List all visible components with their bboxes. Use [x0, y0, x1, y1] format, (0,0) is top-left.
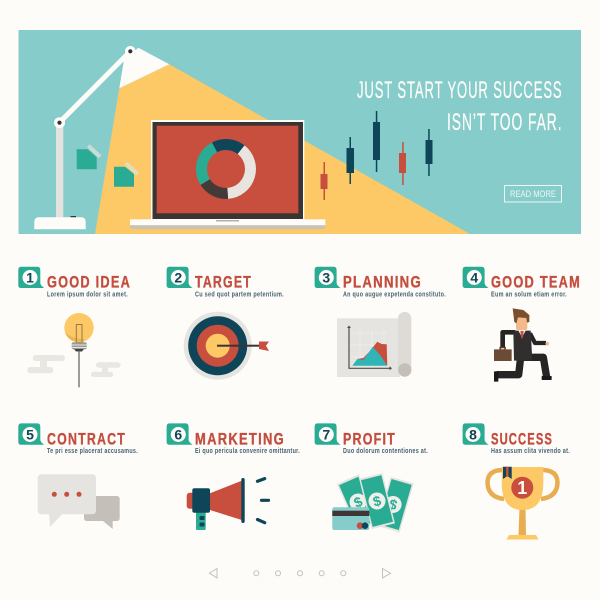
- step 6: marketing: 6: [174, 426, 182, 442]
- icon: money and credit card: $: [387, 496, 399, 513]
- step 4: good team: Eum an solum etiam error.: [491, 290, 567, 298]
- pagination controls: [210, 568, 390, 578]
- step 2: target: TARGET: [195, 274, 252, 292]
- step 4: good team: 4: [470, 270, 478, 286]
- icon: sticky note right: [114, 163, 138, 187]
- step 7: profit: [315, 423, 428, 532]
- icon: next arrow: [382, 568, 390, 578]
- step 8: success: 8: [469, 426, 477, 442]
- step 5: contract: Te pri esse placerat accusamus.: [47, 446, 138, 455]
- icon: chat bubbles: [38, 474, 120, 529]
- icon: desk lamp: [34, 46, 169, 229]
- icon: laptop: [130, 120, 325, 229]
- step 6: marketing: MARKETING: [195, 430, 285, 448]
- step 1: good idea: GOOD IDEA: [47, 274, 131, 292]
- icon: trophy: 1: [517, 478, 527, 498]
- step 5: contract: CONTRACT: [47, 430, 126, 448]
- icon: running businessman: [494, 308, 552, 382]
- step 8: success: SUCCESS: [491, 430, 553, 448]
- step 1: good idea: Lorem ipsum dolor sit amet.: [47, 290, 128, 298]
- step 3: planning: PLANNING: [343, 274, 422, 292]
- step 5: contract: [18, 423, 138, 529]
- step 5: contract: 5: [26, 426, 34, 442]
- step 2: target: Cu sed quot partem petentium.: [195, 290, 284, 298]
- icon: previous arrow: [210, 568, 217, 578]
- step 6: marketing: [167, 423, 300, 530]
- donut chart: [201, 145, 250, 193]
- step 7: profit: Duo dolorum contentiones at.: [343, 446, 428, 455]
- icon: sticky note left: [77, 146, 100, 169]
- step 1: good idea: 1: [26, 270, 34, 286]
- icon: money and credit card: $: [351, 493, 365, 511]
- step 1: good idea: [18, 267, 131, 387]
- step 3: planning: [315, 267, 446, 377]
- icon: money and credit card: [332, 473, 414, 532]
- step 8: success: [463, 423, 570, 540]
- panel: hero banner: [18, 30, 581, 234]
- step 7: profit: 7: [322, 426, 330, 442]
- icon: megaphone: [187, 478, 268, 530]
- icon: light bulb: [27, 313, 121, 387]
- candlestick chart: [320, 111, 432, 200]
- icon: blueprint chart: [337, 312, 411, 377]
- icon: money and credit card: $: [371, 492, 383, 510]
- read more button: READ MORE: [510, 189, 556, 199]
- read more button: [504, 186, 562, 202]
- headline: [357, 77, 562, 136]
- step 2: target: 2: [174, 270, 182, 286]
- step 6: marketing: Ei quo pericula convenire omittantur.: [195, 446, 300, 455]
- lamp light beam: [95, 64, 470, 234]
- step 7: profit: PROFIT: [343, 430, 396, 448]
- step 8: success: Has assum clita vivendo at.: [491, 446, 570, 455]
- step 3: planning: 3: [322, 270, 330, 286]
- icon: bullseye with arrow: [184, 312, 269, 380]
- step 4: good team: [463, 267, 581, 382]
- step 3: planning: An quo augue expetenda constituto.: [343, 290, 446, 298]
- step 2: target: [167, 267, 284, 380]
